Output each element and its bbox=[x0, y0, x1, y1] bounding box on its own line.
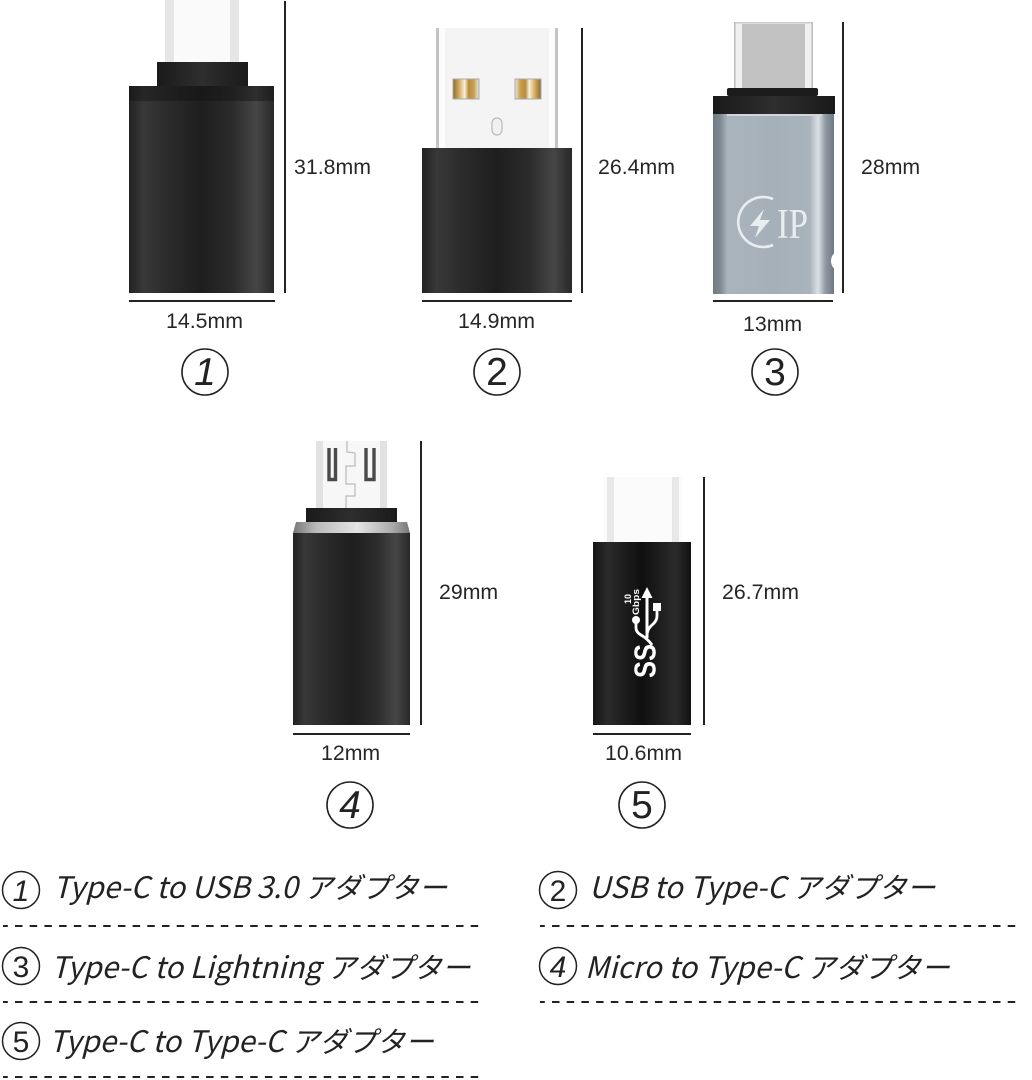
collar 1 bbox=[157, 62, 248, 86]
height label 2: 26.4mm bbox=[598, 155, 675, 179]
number 4 bbox=[327, 782, 373, 828]
connector 4 bbox=[316, 441, 387, 508]
number 1: 1 bbox=[194, 351, 216, 394]
legend item 5 bbox=[2, 1018, 481, 1077]
body 3 bbox=[713, 114, 834, 294]
adapter 2: USB to Type-C bbox=[422, 28, 675, 395]
number 2 bbox=[474, 349, 520, 395]
number 4: 4 bbox=[339, 784, 361, 827]
height line 5 bbox=[703, 477, 705, 725]
legend item 2 bbox=[540, 864, 1018, 926]
legend item 4: Micro to Type-C アダプター bbox=[585, 944, 950, 987]
SS USB logo: Gbps bbox=[631, 589, 642, 615]
body 4 bbox=[293, 533, 410, 725]
width line 3 bbox=[713, 300, 833, 302]
legend item 1 bbox=[2, 864, 481, 926]
legend item 2: 2 bbox=[550, 875, 566, 908]
silver band 4 bbox=[293, 522, 410, 533]
legend item 3: 3 bbox=[13, 951, 29, 984]
width label 4: 12mm bbox=[321, 741, 380, 765]
height line 4 bbox=[420, 441, 422, 725]
connector 2 bbox=[436, 28, 558, 148]
legend item 3 bbox=[2, 944, 481, 1002]
connector 3 bbox=[734, 22, 813, 88]
width line 1 bbox=[129, 300, 275, 302]
adapter 4: Micro to Type-C bbox=[293, 441, 498, 828]
legend item 3: Type-C to Lightning アダプター bbox=[51, 944, 471, 987]
height line 1 bbox=[284, 1, 286, 293]
legend item 4 bbox=[540, 944, 1018, 1002]
adapter 1: Type-C to USB 3.0 bbox=[129, 0, 371, 395]
number 5: 5 bbox=[631, 784, 653, 827]
SS USB logo: SS bbox=[628, 644, 662, 678]
body 2 bbox=[422, 148, 572, 293]
legend item 2: USB to Type-C アダプター bbox=[589, 864, 936, 907]
height label 4: 29mm bbox=[439, 580, 498, 604]
number 3: 3 bbox=[764, 351, 786, 394]
port notch bbox=[831, 250, 853, 272]
body 1 bbox=[129, 86, 274, 293]
SS USB logo: 10 bbox=[623, 594, 633, 604]
width label 5: 10.6mm bbox=[605, 741, 682, 765]
adapter 3: Type-C to Lightning bbox=[713, 22, 920, 395]
height label 5: 26.7mm bbox=[722, 580, 799, 604]
width label 3: 13mm bbox=[743, 312, 802, 336]
body 5 bbox=[593, 542, 691, 725]
connector 5 bbox=[603, 477, 682, 542]
width label 1: 14.5mm bbox=[166, 309, 243, 333]
height line 3 bbox=[842, 22, 844, 293]
logo: lightning in C with IP: IP bbox=[777, 202, 808, 248]
connector 1 bbox=[165, 0, 239, 62]
width line 2 bbox=[422, 300, 572, 302]
number 5 bbox=[619, 782, 665, 828]
legend item 1: 1 bbox=[13, 875, 29, 908]
number 2: 2 bbox=[486, 351, 508, 394]
legend item 5: Type-C to Type-C アダプター bbox=[49, 1018, 434, 1061]
SS USB logo bbox=[623, 587, 662, 678]
collar 4 bbox=[306, 508, 397, 522]
legend item 4: 4 bbox=[550, 951, 566, 984]
height label 3: 28mm bbox=[861, 155, 920, 179]
width line 5 bbox=[593, 733, 691, 735]
legend item 5: 5 bbox=[13, 1026, 29, 1059]
collar 3 bbox=[713, 88, 835, 114]
adapter 5: Type-C to Type-C bbox=[593, 477, 799, 828]
width line 4 bbox=[293, 733, 410, 735]
logo: lightning in C with IP bbox=[738, 197, 808, 248]
height label 1: 31.8mm bbox=[294, 155, 371, 179]
height line 2 bbox=[581, 28, 583, 293]
legend bbox=[2, 864, 1018, 1077]
legend item 1: Type-C to USB 3.0 アダプター bbox=[53, 864, 448, 907]
number 1 bbox=[182, 349, 228, 395]
width label 2: 14.9mm bbox=[458, 309, 535, 333]
number 3 bbox=[752, 349, 798, 395]
